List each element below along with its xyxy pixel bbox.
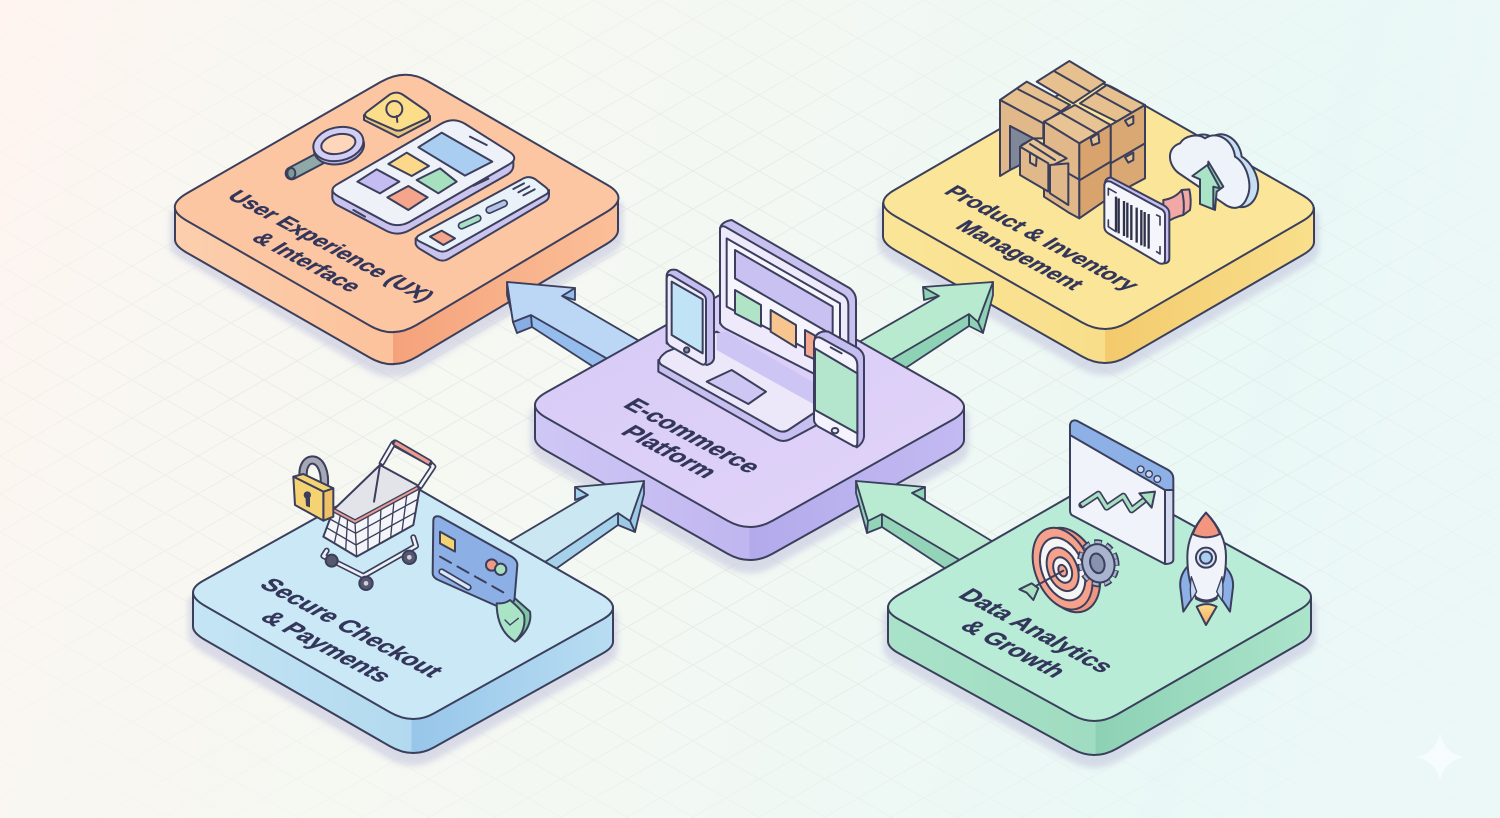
icon: credit card: [433, 516, 517, 613]
left phone: [667, 270, 714, 365]
platform side: [175, 198, 618, 364]
panel: product and inventory management: [883, 61, 1314, 371]
heading: and payments: & Payments: [254, 608, 398, 686]
heading: e-commerce: E-commerce: [617, 395, 767, 477]
platform side: [888, 597, 1311, 755]
heading: and growth: & Growth: [954, 616, 1072, 682]
heading: secure checkout: Secure Checkout: [253, 575, 449, 681]
icon: security shield: [497, 598, 530, 642]
heading: user experience: User Experience (UX): [222, 187, 440, 305]
heading: product and inventory: Product & Inventory: [939, 182, 1146, 294]
panel: user experience and interface: [175, 75, 618, 372]
heading: data analytics: Data Analytics: [952, 585, 1120, 677]
panel: secure checkout and payments: [193, 443, 613, 761]
icon: laptop with monitor and phones: [658, 220, 864, 447]
arrow: from data analytics: [856, 481, 1010, 575]
arrow: from secure checkout: [490, 481, 644, 580]
icon: magnifying glass: [287, 122, 367, 179]
icon: shopping cart: [323, 443, 433, 590]
icon: rocket: [1180, 513, 1233, 625]
icon: navigation bar: [416, 177, 549, 261]
platform top: [883, 82, 1314, 329]
laptop base: [658, 332, 833, 441]
icon: cloud with upload arrow: [1170, 134, 1258, 210]
monitor: [720, 220, 856, 387]
platform top: [193, 481, 613, 719]
icon: target with gear: [1019, 518, 1120, 622]
platform side: [535, 405, 964, 560]
heading: management: Management: [950, 217, 1090, 293]
icon: UX devices: [287, 93, 549, 261]
icon: analytics window: [1070, 420, 1173, 564]
arrow: to product and inventory: [840, 282, 993, 375]
icon: barcode scanner: [1104, 177, 1191, 264]
platform side: [193, 593, 613, 753]
icon: mobile phone: [332, 120, 514, 234]
heading: platform: Platform: [614, 422, 724, 482]
platform top: [888, 483, 1311, 721]
heading: and interface: & Interface: [246, 229, 368, 295]
right phone: [814, 331, 864, 447]
platform top: [175, 75, 618, 332]
arrow: to user experience: [507, 282, 660, 375]
icon: stacked cardboard boxes: [1000, 61, 1145, 218]
panel: data analytics and growth: [888, 420, 1311, 763]
panel: e-commerce platform: [535, 220, 964, 569]
icon: sparkle watermark: [1416, 733, 1464, 781]
icon: padlock: [293, 460, 333, 521]
icon: profile tile: [364, 93, 430, 137]
platform side: [883, 203, 1314, 363]
platform top: [535, 285, 964, 527]
